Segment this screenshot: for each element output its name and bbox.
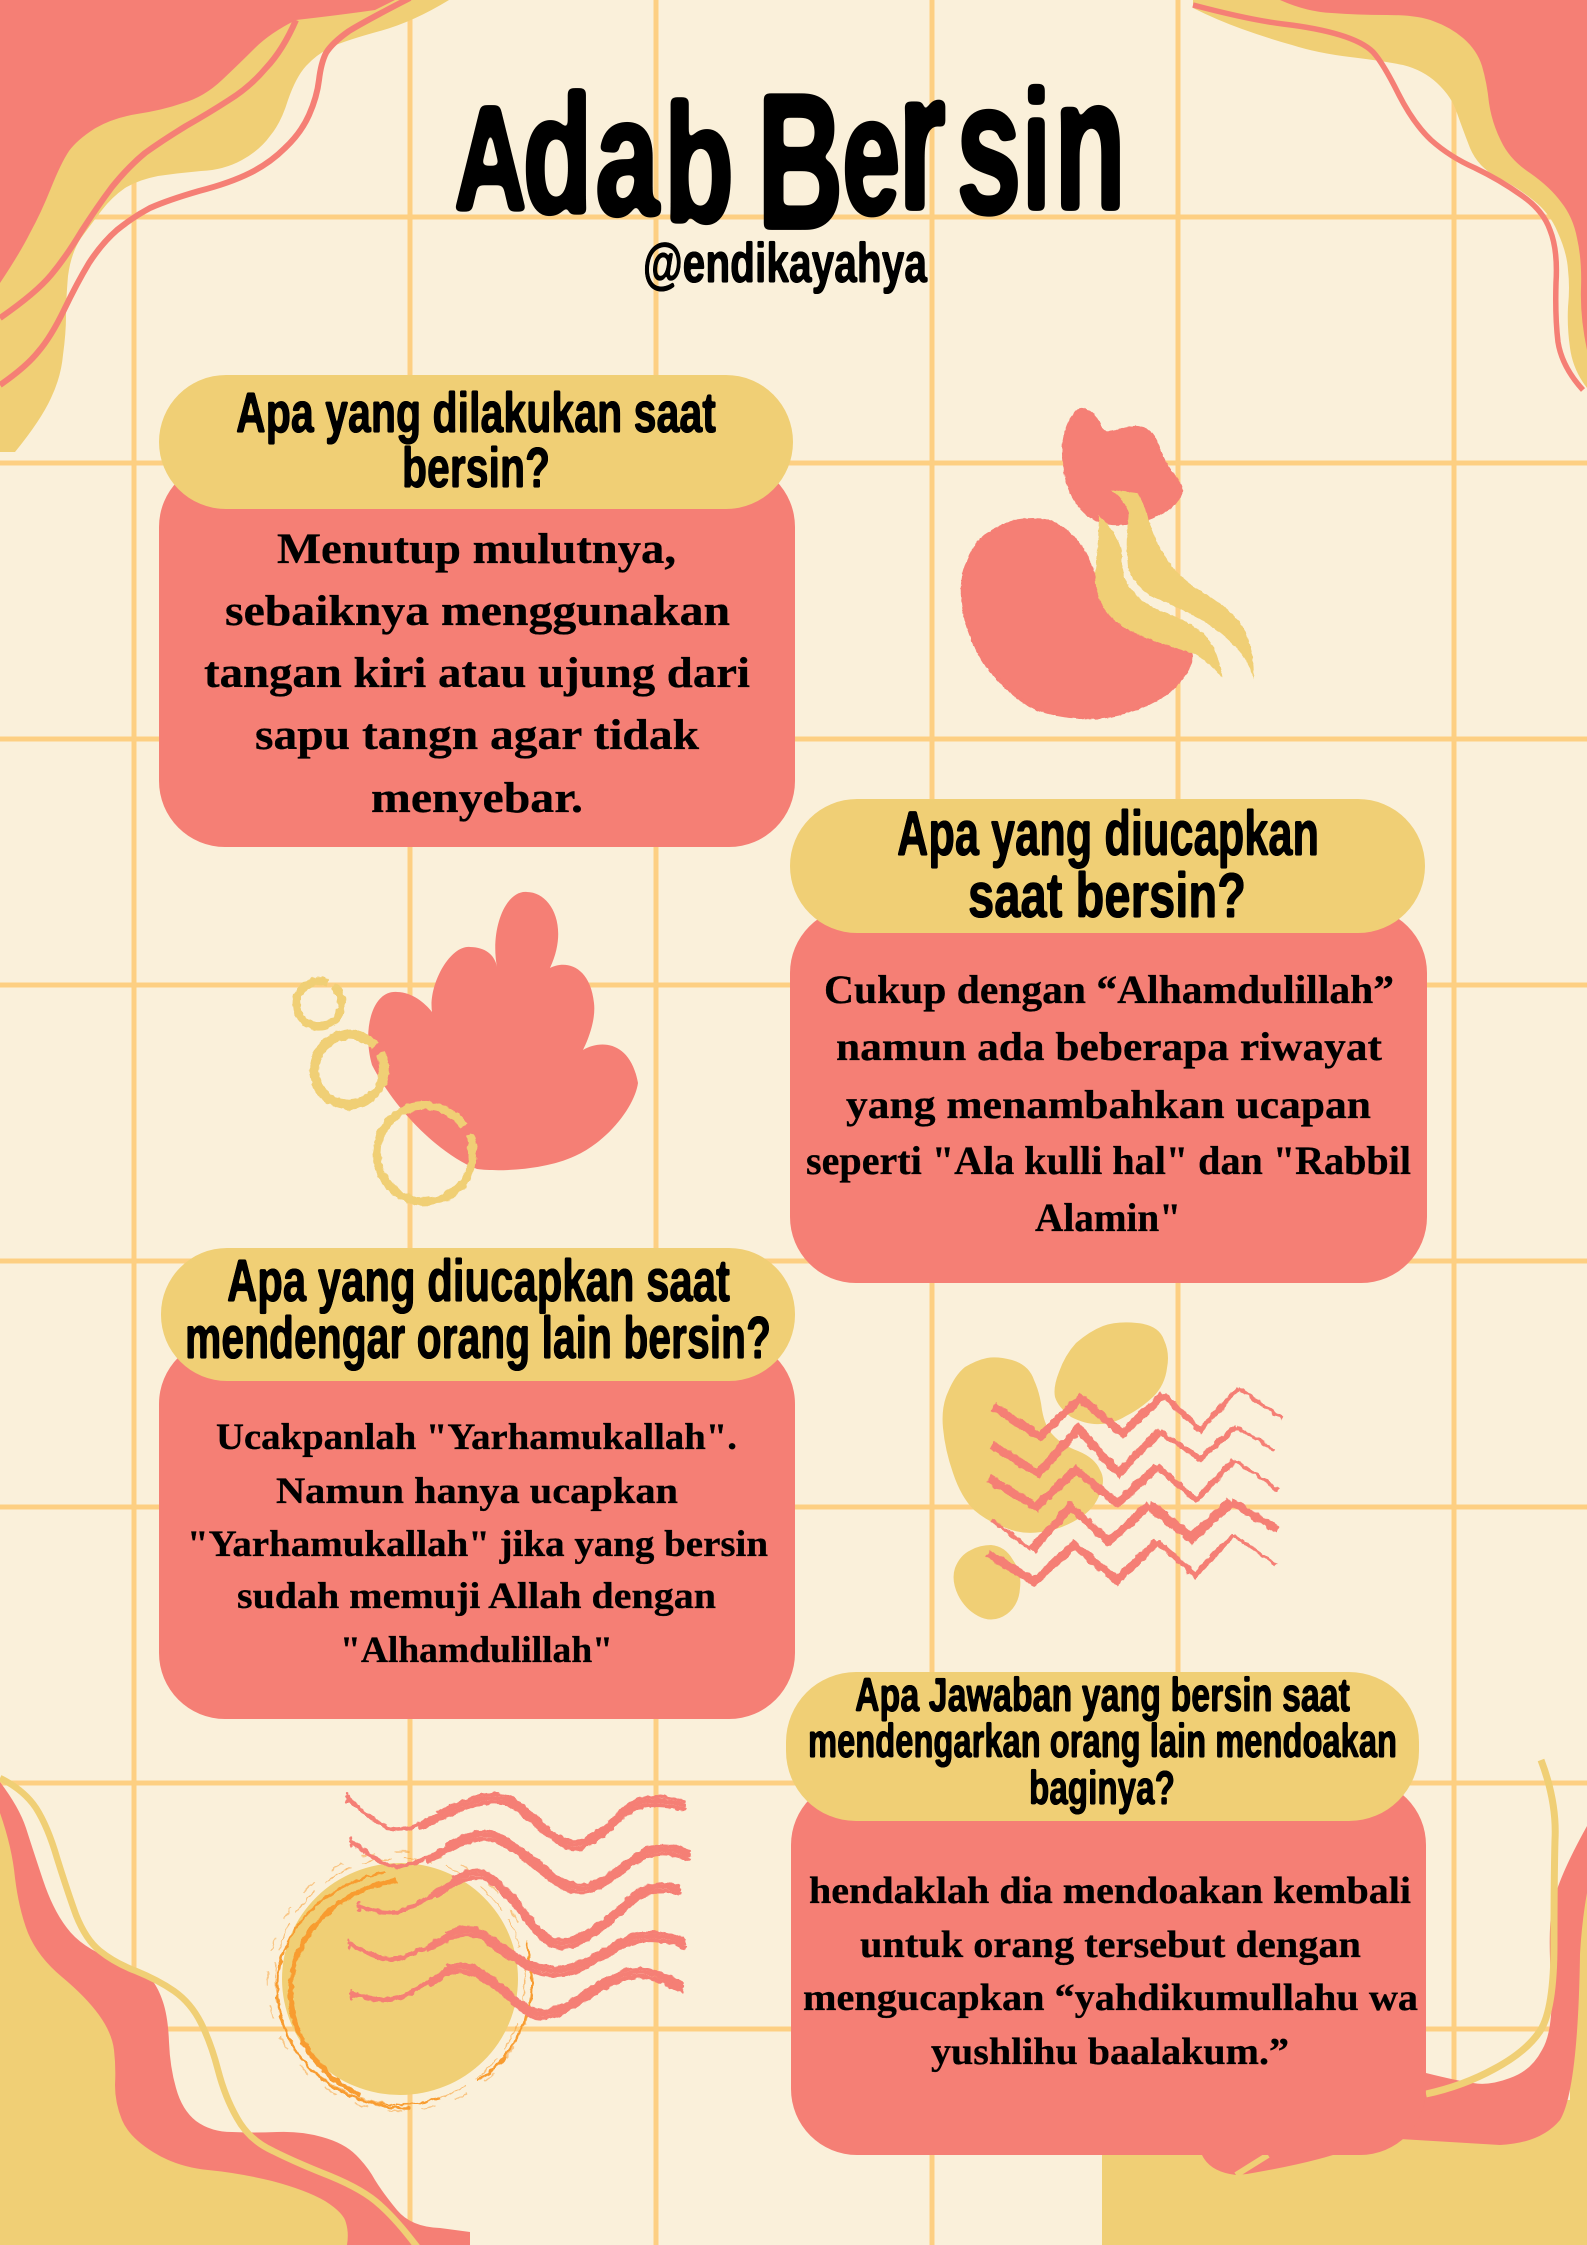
title: b	[664, 68, 734, 258]
panel: apa yang dilakukan: Apa yang dilakukan saat	[236, 381, 716, 445]
panel: apa yang dilakukan: Menutup mulutnya,	[277, 526, 676, 573]
panel: apa yang diucapkan: namun ada beberapa riwayat	[836, 1024, 1383, 1069]
title: r	[898, 29, 946, 252]
panel: mendengar orang lain bersin: mendengar orang lain bersin?	[185, 1305, 771, 1371]
panel: apa yang diucapkan: saat bersin?	[968, 861, 1246, 931]
illustration: yellow sun with pink waves	[268, 1793, 689, 2111]
panel: apa yang dilakukan: bersin?	[402, 436, 550, 500]
title: B	[757, 55, 843, 270]
illustration: yellow blobs with pink zigzags	[943, 1322, 1282, 1620]
panel: jawaban yang bersin	[786, 1668, 1426, 2155]
panel: apa yang dilakukan: menyebar.	[371, 775, 583, 822]
panel: mendengar orang lain bersin	[159, 1248, 795, 1719]
panel: apa yang diucapkan: seperti "Ala kulli hal" dan "Rabbil	[806, 1138, 1411, 1183]
corner decoration: top right waves	[1193, 0, 1587, 390]
title	[454, 29, 1126, 270]
title: e	[842, 60, 901, 250]
panel: jawaban yang bersin: untuk orang tersebut dengan	[860, 1924, 1361, 1966]
panel: apa yang diucapkan	[790, 799, 1427, 1283]
panel: apa yang dilakukan	[159, 375, 795, 847]
panel: mendengar orang lain bersin: Ucakpanlah "Yarhamukallah".	[216, 1417, 737, 1458]
title: a	[595, 61, 660, 251]
panel: jawaban yang bersin: yushlihu baalakum.”	[931, 2031, 1289, 2073]
panel: mendengar orang lain bersin: "Alhamdulillah"	[340, 1630, 613, 1671]
title: A	[454, 76, 527, 243]
title: n	[1054, 38, 1126, 250]
illustration: bean with yellow brush strokes	[962, 409, 1254, 718]
illustration: leaf with yellow rings	[297, 892, 638, 1202]
panel: jawaban yang bersin: mengucapkan “yahdikumullahu wa	[803, 1977, 1418, 2019]
panel: apa yang diucapkan: Apa yang diucapkan	[897, 799, 1319, 869]
panel: apa yang diucapkan: Cukup dengan “Alhamdulillah”	[824, 967, 1394, 1012]
corner decoration: bottom left waves	[0, 1778, 470, 2245]
panel: jawaban yang bersin: hendaklah dia mendoakan kembali	[809, 1870, 1411, 1912]
panel: mendengar orang lain bersin: Apa yang diucapkan saat	[227, 1248, 730, 1314]
title: i	[1022, 55, 1051, 245]
panel: apa yang diucapkan: yang menambahkan ucapan	[846, 1082, 1371, 1127]
panel: mendengar orang lain bersin: "Yarhamukallah" jika yang bersin	[187, 1524, 768, 1565]
panel: apa yang dilakukan: sebaiknya menggunakan	[225, 588, 730, 635]
panel: jawaban yang bersin: baginya?	[1029, 1761, 1175, 1814]
panel: mendengar orang lain bersin: Namun hanya ucapkan	[276, 1471, 678, 1512]
title: s	[956, 42, 1022, 254]
corner decoration: top left waves	[0, 0, 449, 452]
panel: apa yang dilakukan: sapu tangn agar tidak	[255, 712, 699, 759]
panel: apa yang dilakukan: tangan kiri atau ujung dari	[204, 650, 750, 697]
panel: mendengar orang lain bersin: sudah memuji Allah dengan	[237, 1576, 716, 1617]
panel: apa yang diucapkan: Alamin"	[1035, 1195, 1181, 1240]
author handle: @endikayahya	[643, 231, 928, 294]
corner decoration: bottom right waves	[1102, 1760, 1587, 2245]
title: d	[522, 59, 593, 249]
panel: jawaban yang bersin: Apa Jawaban yang bersin saat	[855, 1668, 1350, 1721]
